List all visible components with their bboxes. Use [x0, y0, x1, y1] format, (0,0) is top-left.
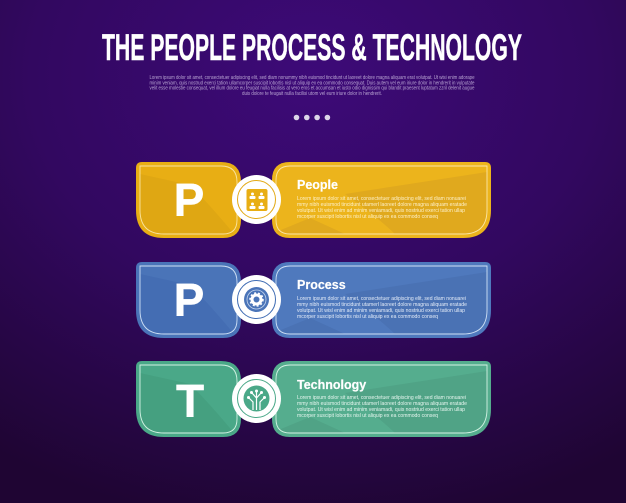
intro text block: duis dolore te feugait nulla facilisi utom vel eum iriure dolor in hendrerit. — [242, 91, 382, 97]
text card: process: mcorper suscipit lobortis nisl ut aliquip ex ea commodo conseq — [297, 314, 438, 320]
icon: gear — [232, 275, 281, 324]
text card: process: mmy nibh euismod tincidunt utamerl laoreet dolore magna aliquam eratade — [297, 302, 467, 308]
text card: process — [272, 262, 491, 338]
text card: process: volutpat. Ut wisl enim ad minim veniamadi, quis nostriud exerci tation ullap — [297, 308, 465, 314]
text card: technology: Lorem ipsum dolor sit amet, consectetuer adipiscing elit, sed diam nonuarei — [297, 395, 466, 401]
intro text block: velit esse molestie consequat, vel illum dolore eu feugiat nulla facilisis at vero eros et accumsan et iusto odio dignissim qui blandit praesent luptatum zzril delenit augue — [150, 86, 475, 92]
text card: technology: mmy nibh euismod tincidunt utamerl laoreet dolore magna aliquam eratade — [297, 401, 467, 407]
text card: technology: mcorper suscipit lobortis nisl ut aliquip ex ea commodo conseq — [297, 413, 438, 419]
text card: process: Lorem ipsum dolor sit amet, consectetuer adipiscing elit, sed diam nonuarei — [297, 296, 466, 302]
text card: people: mcorper suscipit lobortis nisl ut aliquip ex ea commodo conseq — [297, 214, 438, 220]
letter card: T: T — [176, 375, 204, 427]
text card: technology: volutpat. Ut wisl enim ad minim veniamadi, quis nostriud exerci tation ullap — [297, 407, 465, 413]
text card: people — [272, 162, 491, 238]
icon: circuit tree — [232, 374, 281, 423]
text card: people: Lorem ipsum dolor sit amet, consectetuer adipiscing elit, sed diam nonuarei — [297, 196, 466, 202]
letter card: P — [136, 162, 241, 238]
text card: process: Process — [297, 278, 346, 292]
letter card: T — [136, 361, 241, 437]
icon: people grid — [232, 175, 281, 224]
panel: technology — [136, 361, 491, 437]
intro text block — [150, 75, 475, 97]
letter card: P: P — [174, 174, 204, 226]
text card: people: mmy nibh euismod tincidunt utamerl laoreet dolore magna aliquam eratade — [297, 202, 467, 208]
panel: process — [136, 262, 491, 338]
text card: technology: Technology — [297, 378, 366, 392]
text card: technology — [272, 361, 491, 437]
letter card: P: P — [174, 274, 204, 326]
text card: people: People — [297, 178, 338, 192]
letter card: P — [136, 262, 241, 338]
intro text block: Lorem ipsum dolor sit amet, consectetuer adipiscing elit, sed diam nonummy nibh euismod tincidunt ut laoreet dolore magna aliquam erat volutpat. Ut wisi enim adorape — [150, 75, 475, 81]
intro text block: minim veniam, quis nostrud exerci tation ullamcorper suscipit lobortis nisl ut aliquip ex ea commodo consequat. Duis autem vel eum iriure dolor in hendrerit in vulputate — [150, 80, 475, 86]
text card: people: volutpat. Ut wisl enim ad minim veniamadi, quis nostriud exerci tation ullap — [297, 208, 465, 214]
panel: people — [136, 162, 491, 238]
pagination dots — [294, 115, 330, 120]
